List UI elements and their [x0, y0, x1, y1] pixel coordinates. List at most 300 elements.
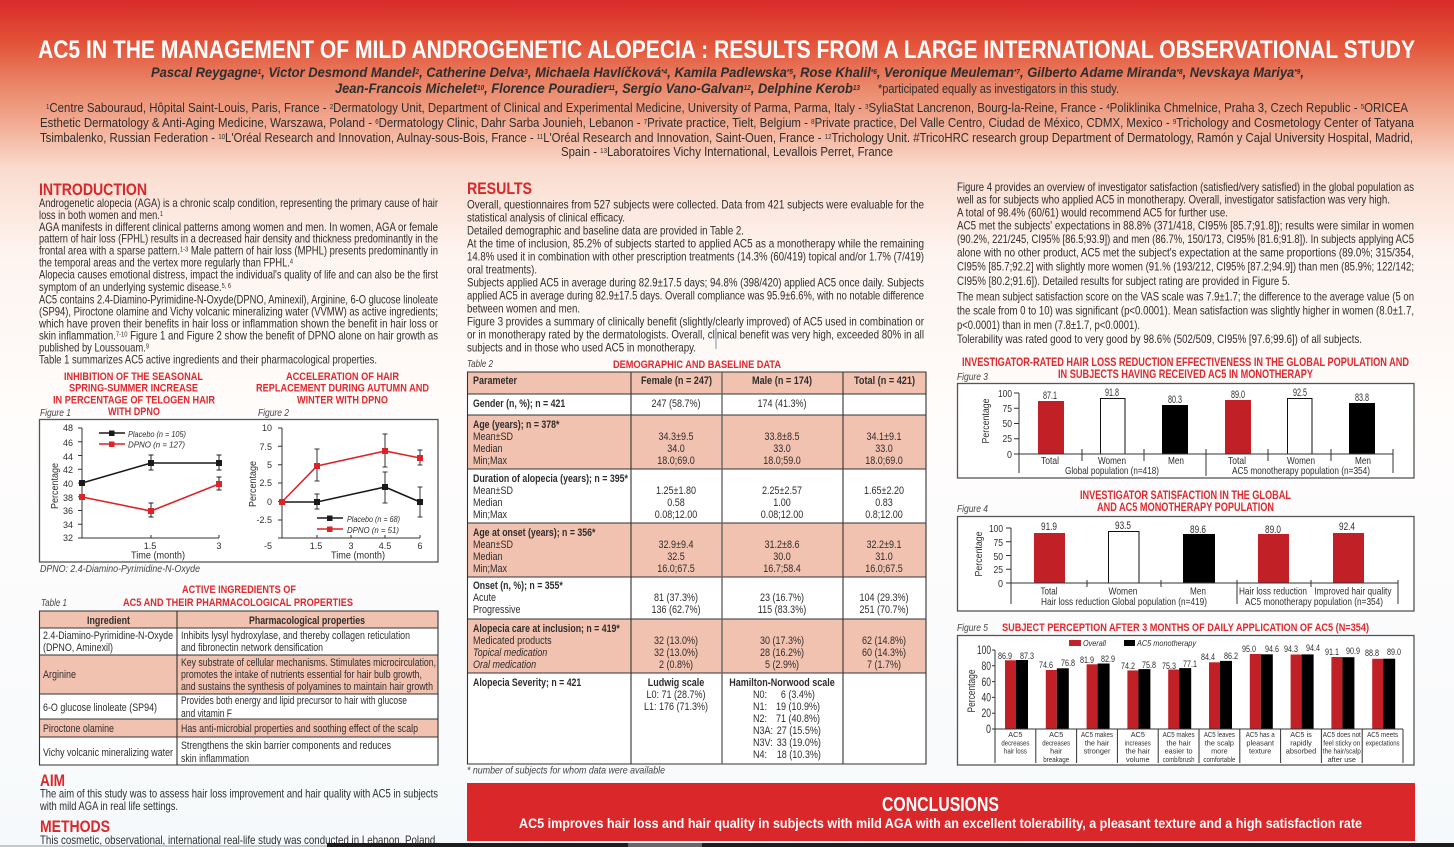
female column: 32 (13.0%) [654, 647, 698, 659]
parameter column: Age (years); n = 378* [473, 419, 560, 431]
parameter column: Mean±SD [473, 431, 513, 443]
category labels: after use [1328, 755, 1356, 764]
table 1: active ingredients: Key substrate of cellular mechanisms. Stimulates microcirculation, [181, 657, 436, 669]
header row: Male (n = 174) [752, 375, 812, 387]
total column [859, 431, 909, 671]
parameter column: Median [473, 497, 503, 509]
affiliations: Tsimbalenko, Russian Federation - [40, 130, 240, 145]
parameter column: Acute [473, 592, 496, 604]
label: figure 2: Figure 2 [258, 407, 289, 419]
male column: 33.8±8.5 [764, 431, 800, 443]
bars [1038, 398, 1375, 454]
text block: introduction: 4 [290, 258, 293, 266]
parameter column: Duration of alopecia (years); n = 395* [473, 473, 628, 485]
heading: figure 1 title: SPRING-SUMMER INCREASE [69, 382, 198, 394]
male column: 115 (83.3%) [758, 604, 806, 616]
male column: Hamilton-Norwood scale [729, 677, 835, 689]
category labels: feel sticky on [1323, 738, 1360, 748]
category labels: decreases [1001, 738, 1030, 748]
text block: introduction: Table 1 summarizes AC5 active ingredients and their pharmacological properties. [39, 354, 377, 366]
category labels: Hair loss reduction Global population (n=419) [1041, 596, 1207, 608]
category labels: the scalp [1205, 738, 1234, 748]
axis title: Time (month) [131, 550, 185, 562]
category labels: Men [1168, 455, 1184, 467]
panel: methods [40, 817, 438, 847]
category labels: AC5 meets [1367, 730, 1398, 739]
category labels: hair loss [1004, 746, 1027, 756]
text block: results: between women and men. [467, 302, 580, 316]
affiliations: Private practice, Tielt, Belgium - [647, 115, 811, 130]
table 1: active ingredients: and vitamin F [181, 708, 232, 720]
value labels: 90.9 [1346, 646, 1360, 657]
value labels: 89.0 [1387, 647, 1401, 658]
heading: figure 4 title: INVESTIGATOR SATISFACTION IN THE GLOBAL [1080, 490, 1291, 502]
total column: 7 (1.7%) [867, 659, 901, 671]
Hamilton-Norwood values: 27 (15.5%) [777, 725, 821, 737]
parameter column: Progressive [473, 604, 521, 616]
legend: Overall [1083, 638, 1107, 648]
authors: *9 [1294, 69, 1300, 76]
male column: 1.00 [773, 497, 791, 509]
table 1: active ingredients: skin inflammation [181, 753, 249, 765]
Hamilton-Norwood values: N2: [753, 713, 767, 725]
affiliations: Dermatology Unit, Department of Clinical and Experimental Medicine, University of Parma, Parma, Italy - [333, 100, 865, 115]
authors: , Catherine Delva [418, 64, 524, 80]
affiliations: 12 [825, 134, 832, 141]
authors [151, 64, 1304, 96]
category labels: increases [1125, 738, 1151, 748]
table 1: active ingredients: Inhibits lysyl hydroxylase, and thereby collagen reticulation [181, 630, 410, 642]
heading: figure 2 title: WINTER WITH DPNO [297, 394, 388, 406]
table 1: active ingredients: Ingredient [87, 615, 130, 627]
value labels: 93.5 [1115, 520, 1131, 532]
category labels [1041, 455, 1371, 477]
chart: figure 1 line chart: 38 [63, 493, 73, 503]
category labels: comb/brush [1163, 755, 1195, 764]
chart: figure 4 bar chart: 100 [989, 523, 1003, 535]
text block: introduction: Figure 1 and Figure 2 show the benefit of DPNO alone on hair growth as [127, 330, 438, 342]
chart: figure 1 line chart: 3 [216, 541, 222, 551]
male column: 28 (16.2%) [760, 647, 804, 659]
total column: 18.0;69.0 [865, 455, 903, 467]
affiliations: 13 [600, 148, 607, 155]
value labels: 83.8 [1355, 392, 1369, 404]
Hamilton-Norwood values: 71 (40.8%) [776, 713, 820, 725]
value labels: 86.2 [1224, 651, 1238, 662]
parameter column: Topical medication [473, 647, 548, 659]
authors: , Nevskaya Mariya [1182, 64, 1294, 80]
affiliations: 9 [1173, 119, 1176, 126]
y axis labels: 80 [982, 661, 991, 673]
header row: Parameter [473, 375, 518, 387]
table 2: demographic and baseline data [468, 372, 926, 764]
female column: 32 (13.0%) [654, 635, 698, 647]
authors: , Victor Desmond Mandel [260, 64, 417, 80]
chart: figure 3 bar chart: 75 [1002, 403, 1012, 415]
category labels: Women [1287, 455, 1315, 467]
category labels: AC5 does not [1323, 730, 1361, 739]
value labels: 74.2 [1121, 661, 1135, 672]
affiliations: Dermatology Clinic, Dahr Sarba Jounieh, Lebanon - [379, 115, 644, 130]
legend: DPNO (n = 127) [128, 440, 185, 450]
female column: 2 (0.8%) [659, 659, 693, 671]
chart: figure 1 line chart: 44 [63, 452, 73, 462]
legend [317, 515, 400, 535]
authors: , Michaela Havlíčková [527, 64, 661, 80]
text block: results: Detailed demographic and baseline data are provided in Table 2. [467, 224, 744, 238]
chart: figure 4 bar chart [958, 516, 1414, 611]
legend [99, 430, 186, 450]
parameter column: Min;Max [473, 563, 507, 575]
category labels: texture [1249, 746, 1271, 756]
category labels [1001, 730, 1400, 764]
female column: L1: 176 (71.3%) [644, 701, 708, 713]
table 1: active ingredients: and sustains the synthesis of polyamines to maintain hair growth [181, 681, 433, 693]
female column: 136 (62.7%) [651, 604, 701, 616]
chart: figure 4 bar chart: 50 [994, 551, 1003, 563]
chart: figure 1 line chart [50, 423, 222, 562]
value labels: 86.9 [998, 651, 1012, 662]
heading: figure 1 title: IN PERCENTAGE OF TELOGEN HAIR [53, 394, 215, 406]
parameter column: Medicated products [473, 635, 552, 647]
male column: 16.7;58.4 [763, 563, 801, 575]
bars [1034, 532, 1364, 583]
value labels: 91.9 [1041, 521, 1057, 533]
authors: *5 [787, 69, 793, 76]
total column: 60 (14.3%) [862, 647, 906, 659]
value labels: 94.6 [1265, 644, 1279, 655]
category labels: AC5 makes [1163, 730, 1195, 739]
label: figure 1: Figure 1 [40, 407, 71, 419]
heading: results: RESULTS [467, 179, 532, 198]
female column: 16.0;67.5 [657, 563, 695, 575]
heading: table 1 title: ACTIVE INGREDIENTS OF [182, 584, 296, 596]
text block: introduction: symptom of an underlying systemic disease. [39, 281, 266, 294]
authors: 2 [415, 69, 419, 76]
total column: 31.0 [875, 551, 893, 563]
series: placebo [79, 455, 222, 486]
total column: 104 (29.3%) [859, 592, 909, 604]
heading: figure 4 title [1080, 490, 1291, 514]
male column: 23 (16.7%) [760, 592, 804, 604]
category labels: Total [1228, 455, 1246, 467]
text block: results: oral treatments). [467, 262, 537, 276]
heading: figure 2 title: ACCELERATION OF HAIR [286, 371, 399, 383]
authors: , Rose Khalil [792, 64, 872, 80]
value labels: 91.8 [1105, 387, 1119, 399]
Hamilton-Norwood values: 19 (10.9%) [776, 701, 820, 713]
affiliations: L'Oréal Research and Innovation, Aulnay-sous-Bois, France - [225, 130, 537, 145]
y axis labels: 60 [982, 677, 991, 689]
affiliations: Laboratoires Vichy International, Levallois Perret, France [607, 144, 893, 159]
category labels: decreases [1042, 738, 1070, 748]
table 1: active ingredients: Pharmacological properties [249, 615, 365, 627]
chart: figure 1 line chart: 34 [63, 520, 73, 530]
category labels: volume [1126, 755, 1150, 764]
total column: 34.1±9.1 [866, 431, 902, 443]
authors: , [1299, 64, 1304, 80]
heading: aim: AIM [40, 771, 65, 790]
text block: results: 14.8% used it in combination with other prescription treatments (14.3% (60/419) topical and/or 1.7% (7/419) [467, 250, 924, 264]
affiliations: ORICEA [1364, 100, 1408, 115]
affiliations: Centre Sabouraud, Hôpital Saint-Louis, Paris, France - [49, 100, 330, 115]
chart: figure 3 bar chart [958, 384, 1414, 478]
total column: 62 (14.8%) [862, 635, 906, 647]
series: DPNO [279, 434, 423, 505]
affiliations: 2 [330, 104, 333, 111]
category labels: breakage [1043, 755, 1069, 764]
heading: figure 3 title [962, 357, 1409, 381]
authors: *6 [871, 69, 877, 76]
male column: 18.0;59.0 [763, 455, 801, 467]
female column: 32.9±9.4 [658, 539, 694, 551]
chart: figure 2 line chart: 0 [267, 497, 272, 507]
parameter column: Age at onset (years); n = 356* [473, 527, 596, 539]
category labels: more [1211, 746, 1228, 756]
authors: 10 [477, 85, 484, 92]
label: table 2: Table 2 [467, 358, 493, 370]
text block: results continued: CI95% [80.2;91.6]). Detailed results for subject rating are provided in Figure 5. [957, 275, 1290, 288]
authors: Pascal Reygagne [151, 64, 266, 80]
chart: figure 3 bar chart: 100 [998, 388, 1012, 400]
value labels: 88.8 [1365, 648, 1379, 659]
affiliations: L'Oréal Research and Innovation, Saint-Ouen, France - [543, 130, 825, 145]
Hamilton-Norwood values [753, 689, 821, 761]
value labels: 94.3 [1284, 644, 1298, 655]
text block: results: Figure 3 provides a summary of clinically benefit (slightly/clearly improved) of AC5 used in combination or [467, 314, 924, 328]
chart: figure 2 line chart: 1.5 [310, 541, 322, 551]
value labels: 92.4 [1339, 521, 1355, 533]
value labels: 89.0 [1265, 524, 1281, 536]
table 1: active ingredients: Vichy volcanic mineralizing water [43, 747, 173, 759]
heading: figure 1 title: INHIBITION OF THE SEASONAL [64, 371, 203, 383]
category labels [1040, 586, 1392, 608]
Hamilton-Norwood values: N1: [753, 701, 767, 713]
male column: 31.2±8.6 [764, 539, 800, 551]
female column: 32.5 [667, 551, 685, 563]
affiliations: Poliklinika Chmelnice, Praha 3, Czech Republic - [1110, 100, 1361, 115]
chart: figure 2 line chart: 10 [262, 423, 272, 433]
legend: Placebo (n = 105) [128, 430, 186, 439]
total column: 0.8;12.00 [865, 509, 903, 521]
text block: introduction: the temporal areas and the vertex more regularly than FPHL. [39, 256, 352, 270]
heading: figure 4 title: AND AC5 MONOTHERAPY POPULATION [1097, 502, 1274, 514]
parameter column: Median [473, 443, 503, 455]
chart: figure 4 bar chart: 25 [994, 564, 1003, 576]
heading: figure 2 title: REPLACEMENT DURING AUTUMN AND [256, 382, 429, 394]
male column: 174 (41.3%) [757, 398, 807, 410]
authors: , Florence Pouradier [483, 80, 610, 96]
parameter column: Alopecia Severity; n = 421 [473, 677, 582, 689]
heading: figure 1 title [53, 371, 215, 418]
category labels: AC5 monotherapy population (n=354) [1232, 465, 1370, 477]
value labels: 92.5 [1293, 387, 1307, 399]
heading: figure 5 title: SUBJECT PERCEPTION AFTER 3 MONTHS OF DAILY APPLICATION OF AC5 (N=354) [1002, 622, 1369, 634]
category labels: Women [1098, 455, 1126, 467]
category labels: pleasant [1246, 738, 1274, 748]
value labels: 91.1 [1325, 647, 1339, 658]
heading: figure 1 title: WITH DPNO [108, 406, 160, 418]
affiliations [40, 100, 1415, 159]
header [38, 36, 1415, 159]
category labels: the hair/scalp [1323, 746, 1361, 756]
text block: results [467, 198, 924, 354]
male column: 2.25±2.57 [762, 485, 802, 497]
affiliations: Private practice, Del Valle Centro, Ciudad de México, CDMX, Mexico - [815, 115, 1173, 130]
heading: figure 3 title: IN SUBJECTS HAVING RECEIVED AC5 IN MONOTHERAPY [1058, 369, 1313, 381]
value labels: 89.0 [1231, 389, 1245, 401]
table 1: active ingredients: Strengthens the skin barrier components and reduces [181, 740, 391, 752]
y axis labels: 40 [982, 692, 991, 704]
table 1: active ingredients: Arginine [43, 669, 76, 681]
chart: figure 2 line chart: -2.5 [256, 515, 272, 525]
text block: introduction: 5, 6 [222, 283, 231, 290]
value labels: 94.4 [1306, 643, 1320, 654]
authors: , Sergio Vano-Galvan [614, 80, 744, 96]
parameter column: Median [473, 551, 503, 563]
parameter column: Oral medication [473, 659, 536, 671]
panel: results [467, 179, 924, 354]
affiliations: Trichology and Cosmetology Center of Tatyana [1176, 115, 1415, 130]
category labels: AC5 leaves [1204, 730, 1235, 739]
value labels: 84.4 [1201, 652, 1215, 663]
category labels: comfortable [1203, 755, 1235, 764]
female column: L0: 71 (28.7%) [646, 689, 706, 701]
label: figure 4: Figure 4 [957, 503, 988, 515]
category labels: stronger [1084, 746, 1111, 756]
parameter column: Min;Max [473, 455, 507, 467]
header row: Total (n = 421) [854, 375, 915, 387]
chart: figure 2 line chart: 7.5 [259, 442, 272, 452]
chart: figure 2 line chart: -5 [264, 541, 272, 551]
female column: 1.25±1.80 [656, 485, 696, 497]
text block: introduction: Male pattern of hair loss (MPHL) presents predominantly in [188, 244, 438, 258]
text block: methods: This cosmetic, observational, international real-life study was conducted in Lebanon, Poland, [40, 834, 438, 847]
category labels: Women [1108, 586, 1138, 598]
parameter column: Gender (n, %); n = 421 [473, 398, 566, 410]
bars: overall [1005, 654, 1383, 729]
heading: table 1 title [123, 584, 353, 609]
affiliations: Esthetic Dermatology & Anti-Aging Medicine, Warszawa, Poland - [40, 115, 417, 130]
chart: figure 2 line chart: 2.5 [259, 478, 272, 488]
text block: results: statistical analysis of clinical efficacy. [467, 210, 625, 224]
value labels: 87.3 [1020, 651, 1034, 662]
legend: Placebo (n = 68) [347, 515, 400, 524]
affiliations: 8 [811, 119, 815, 126]
category labels: AC5 is [1290, 730, 1312, 739]
parameter column: Mean±SD [473, 539, 513, 551]
chart: figure 1 line chart: 42 [63, 465, 73, 475]
affiliations: 1 [46, 104, 50, 111]
category labels: AC5 monotherapy population (n=354) [1245, 596, 1383, 608]
value labels: 80.3 [1168, 394, 1182, 406]
heading: methods: METHODS [40, 817, 110, 836]
text block: introduction: 1 [160, 211, 163, 218]
value labels: 82.9 [1101, 654, 1115, 665]
category labels: absorbed [1286, 746, 1316, 756]
legend: AC5 monotherapy [1136, 638, 1197, 648]
Hamilton-Norwood values: N4: [753, 749, 767, 761]
table 1: active ingredients: and fibronectin network densification [181, 642, 323, 654]
category labels: AC5 [1049, 730, 1063, 739]
value labels [1041, 520, 1355, 536]
y axis labels: 20 [982, 708, 991, 720]
text block: results: subjects and in those who used AC5 in monotherapy. [467, 340, 696, 354]
authors: , Kamila Padlewska [666, 64, 787, 80]
table 1: active ingredients [40, 611, 438, 765]
category labels: the hair [1166, 738, 1191, 748]
text block: results: At the time of inclusion, 85.2% of subjects started to applied AC5 as a monotherapy while the remaining [467, 236, 924, 250]
category labels: Total [1041, 455, 1059, 467]
text block: conclusions: AC5 improves hair loss and hair quality in subjects with mild AGA with an excellent tolerability, a pleasant texture and a high satisfaction rate [519, 816, 1362, 831]
panel: aim [39, 771, 438, 813]
Hamilton-Norwood values: 33 (19.0%) [777, 737, 821, 749]
total column: 32.2±9.1 [866, 539, 902, 551]
Hamilton-Norwood values: 18 (10.3%) [777, 749, 821, 761]
table 1: active ingredients: promotes the intake of nutrients essential for hair bulb growth, [181, 669, 422, 681]
category labels: the hair [1085, 738, 1110, 748]
value labels [1043, 387, 1369, 406]
heading: table 2 title: DEMOGRAPHIC AND BASELINE DATA [613, 359, 781, 371]
chart: figure 1 line chart: 36 [63, 506, 73, 516]
label: figure 5: Figure 5 [957, 622, 988, 634]
authors: *7 [1014, 69, 1021, 76]
authors: *4 [661, 69, 667, 76]
table 1: active ingredients: Piroctone olamine [43, 723, 114, 735]
table 1: active ingredients: Provides both energy and lipid precursor to hair with glucose [181, 695, 407, 707]
text block: introduction: Alopecia causes emotional distress, impact the individual's quality of life and can also be the first [39, 268, 439, 282]
total column: 33.0 [875, 443, 893, 455]
text block: introduction: loss in both women and men. [39, 209, 190, 222]
chart: figure 1 line chart: 46 [63, 438, 73, 448]
affiliations: 6 [375, 119, 379, 126]
text block: aim: with mild AGA in real life settings. [39, 800, 178, 813]
female column: Ludwig scale [648, 677, 705, 689]
authors: , Veronique Meuleman [876, 64, 1014, 80]
authors: 11 [608, 85, 615, 92]
axis title: Percentage [248, 461, 259, 507]
female column: 0.08;12.00 [655, 509, 698, 521]
chart: figure 3 bar chart: 0 [1007, 449, 1012, 461]
value labels: 77.1 [1183, 659, 1197, 670]
affiliations: Spain - [561, 144, 602, 159]
category labels: Global population (n=418) [1065, 465, 1159, 477]
heading: figure 2 title [256, 371, 429, 406]
male column [729, 398, 835, 689]
category labels: Hair loss reduction [1239, 586, 1307, 598]
text block: introduction: 7-10 [116, 332, 128, 338]
chart: figure 3 bar chart: 25 [1002, 433, 1012, 445]
chart: figure 2 line chart: 5 [267, 460, 272, 470]
value labels: 89.6 [1190, 524, 1206, 536]
category labels: Total [1040, 586, 1058, 598]
chart: figure 1 line chart: 32 [63, 533, 73, 543]
axis title: Percentage [50, 463, 61, 509]
panel: figures 1 and 2 frame [40, 420, 438, 562]
chart: figure 2 line chart: 6 [417, 541, 423, 551]
text block: introduction: frontal area with a sparse pattern. [39, 244, 212, 258]
category labels: Men [1355, 455, 1371, 467]
affiliations: 10 [218, 134, 225, 141]
value labels: 75.8 [1142, 660, 1156, 671]
female column: 81 (37.3%) [654, 592, 698, 604]
chart: figure 4 bar chart: 75 [994, 537, 1003, 549]
text block: introduction: AC5 contains 2.4-Diamino-Pyrimidine-N-Oxyde(DPNO, Aminexil), Arginine, 6-O glucose linoleate [39, 294, 438, 306]
text block: aim: The aim of this study was to assess hair loss improvement and hair quality with AC5 in subjects [40, 788, 438, 800]
text block: results continued: Tolerability was rated good to very good by 98.6% (502/509, CI95% [97.6;99.6]) of all subjects. [957, 333, 1362, 346]
male column: 30 (17.3%) [760, 635, 804, 647]
affiliations: 3 [865, 104, 869, 111]
